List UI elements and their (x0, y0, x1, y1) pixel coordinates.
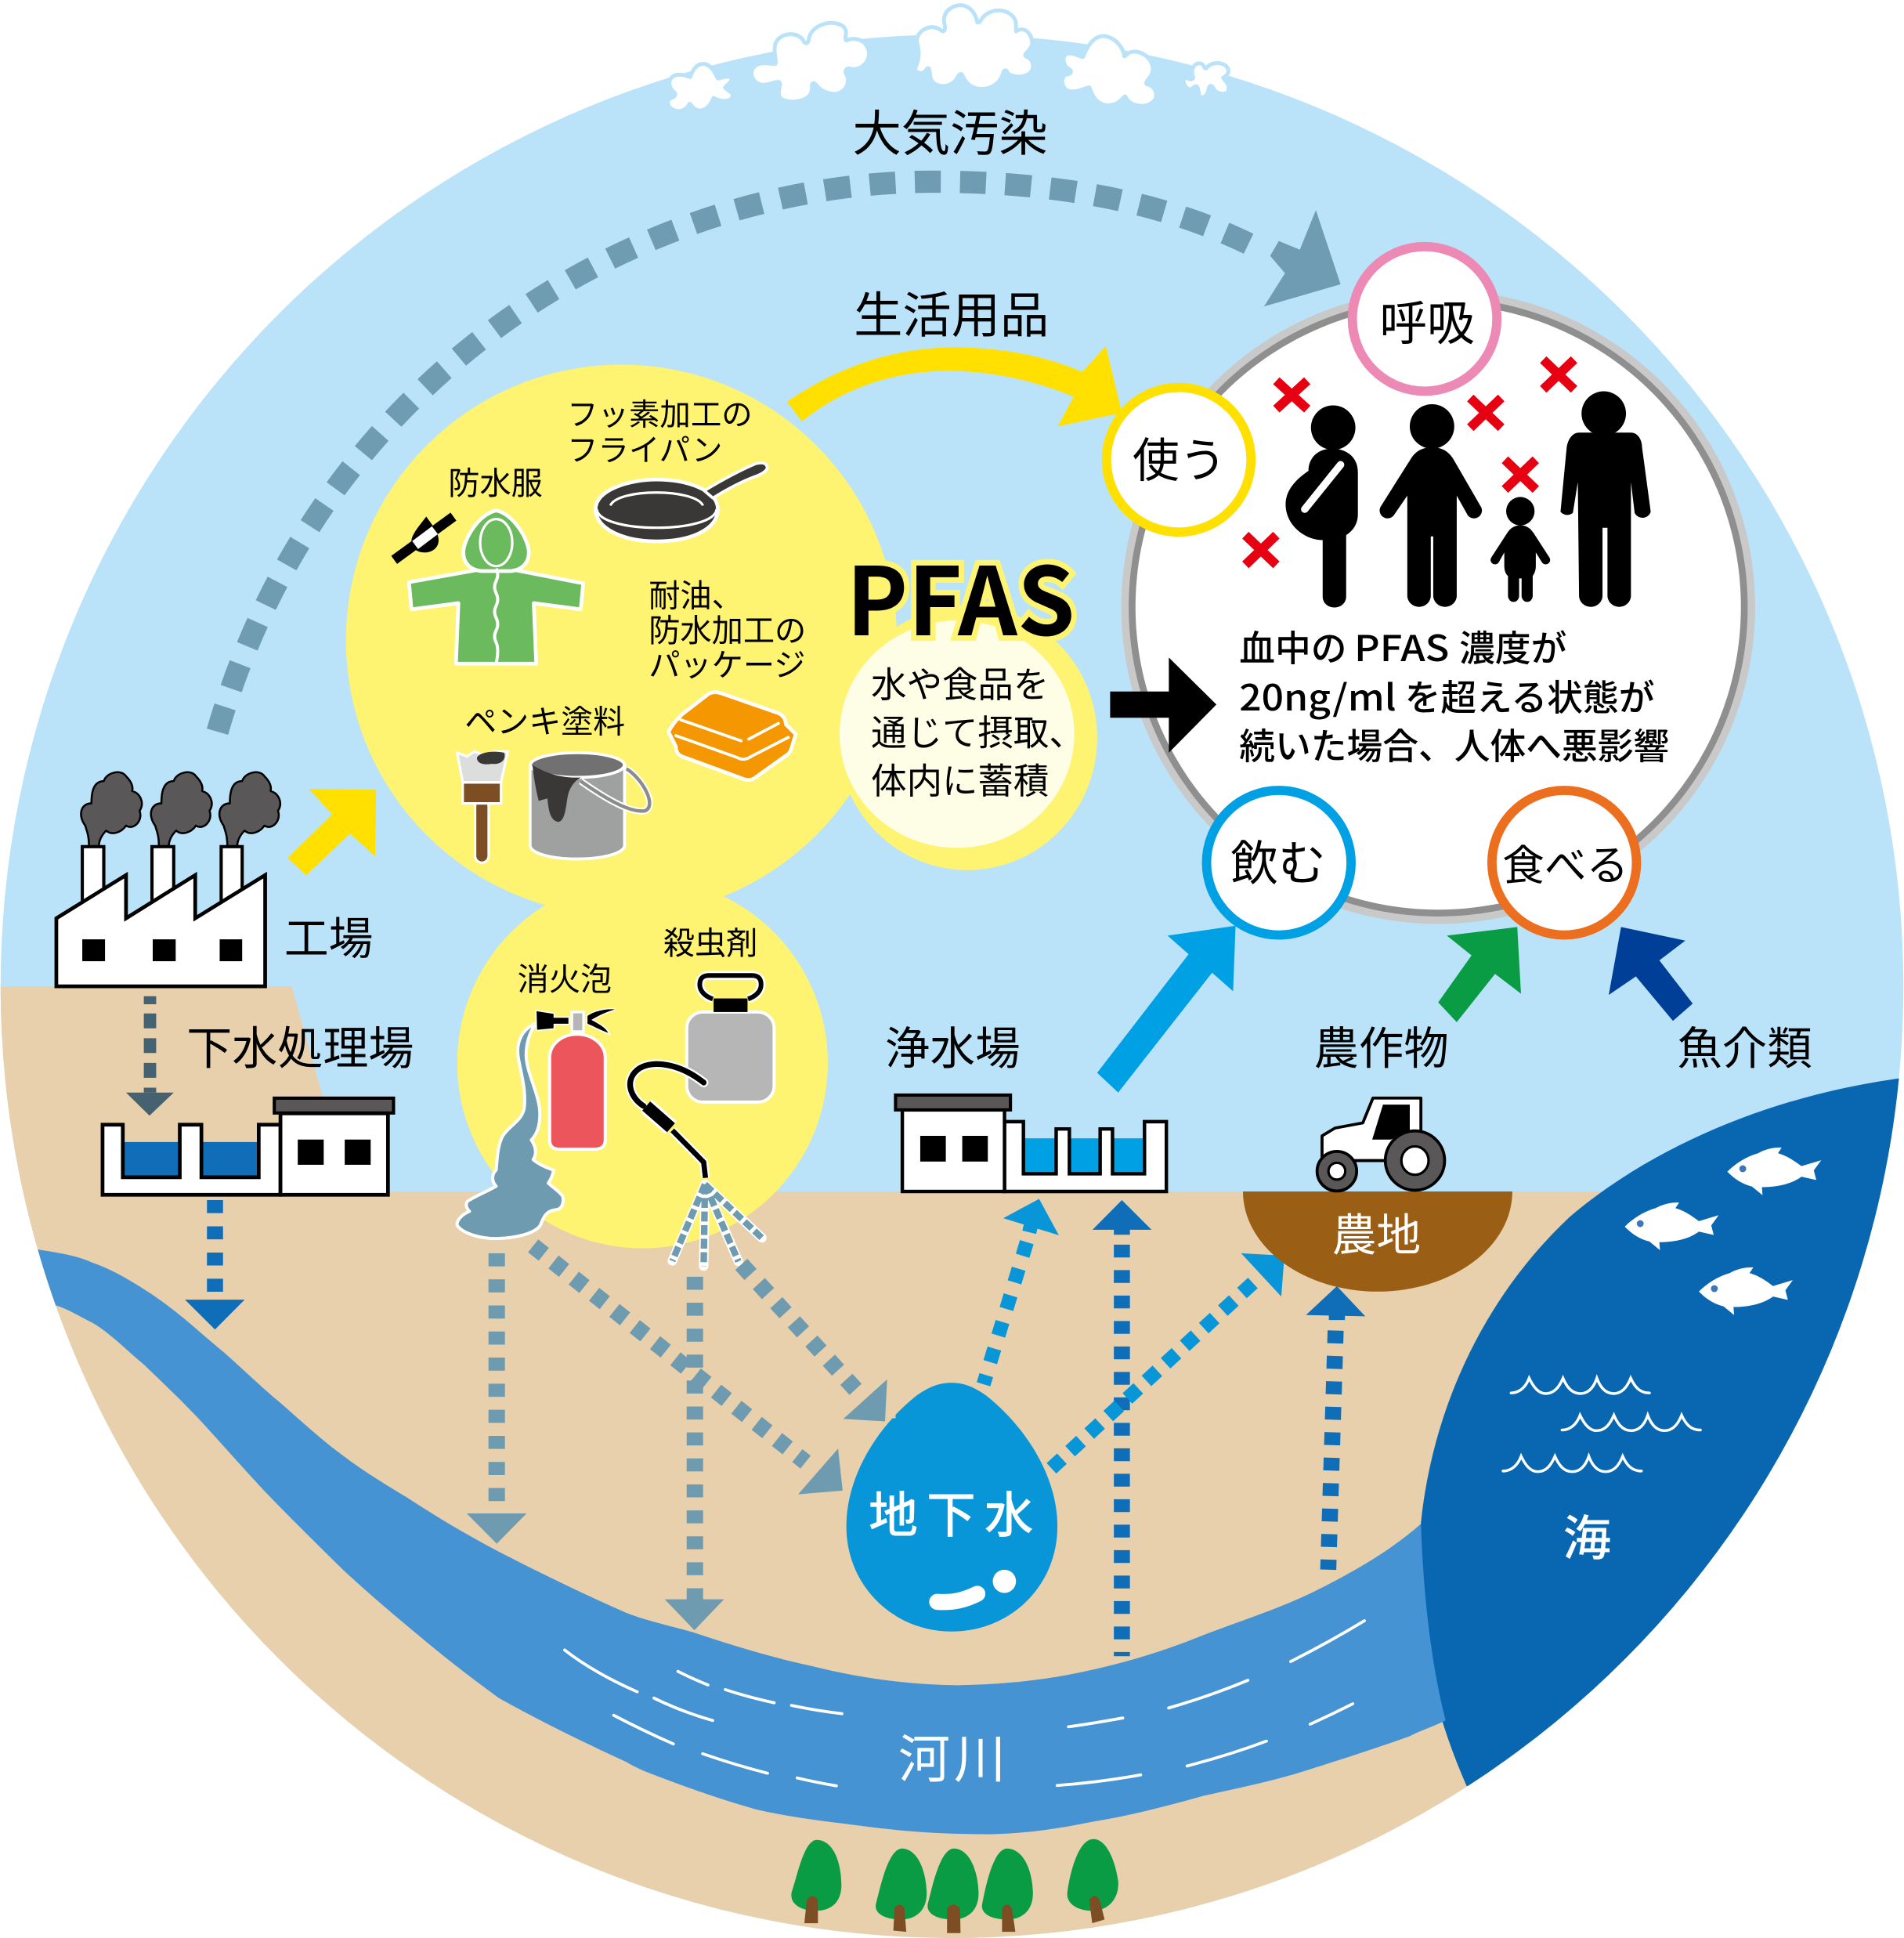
icon: tractor (1317, 1098, 1444, 1191)
health effect text: を超える状態が (1405, 670, 1655, 721)
label: pesticide: 殺虫剤 (663, 926, 757, 961)
label: crops: 農作物 (1314, 1024, 1449, 1074)
icon: groundwater drop (847, 1383, 1057, 1632)
health effect text (1239, 620, 1669, 770)
panel: human exposure circle (1122, 290, 1755, 924)
heading: air pollution: 大気汚染 (853, 107, 1048, 161)
label: frying pan: フライパン (567, 434, 722, 468)
label: sea: 海 (1563, 1512, 1611, 1566)
arrow: river to farmland (1306, 1286, 1365, 1570)
badge: use: 使う (1133, 435, 1227, 487)
icon: frying pan (595, 463, 768, 541)
label: factory: 工場 (284, 915, 373, 964)
arrow: foam to groundwater (533, 1246, 843, 1495)
river current lines (565, 1621, 1364, 1786)
label: oil and waterproof packaging: 耐油、 (649, 579, 743, 614)
label: waterproof clothes: 防水服 (448, 466, 543, 501)
health effect text: 血中の (1239, 620, 1347, 672)
label: oil and waterproof packaging: 防水加工の (649, 613, 806, 649)
label: sewage plant: 下水処理場 (186, 1023, 414, 1074)
label: seafood: 魚介類 (1677, 1024, 1812, 1074)
icon: fire extinguisher and foam (457, 1009, 615, 1238)
label: oil and waterproof packaging: パッケージ (649, 648, 805, 683)
fish eyes (1637, 1166, 1747, 1292)
panel: intake note: 通じて摂取、 (871, 713, 1085, 753)
fish 1 (1727, 1148, 1821, 1195)
label: frying pan: フッ素加工の (567, 398, 753, 432)
label: fire foam: 消火泡 (518, 962, 612, 997)
icon: factory (56, 772, 280, 986)
icon: adult (1560, 392, 1651, 607)
icon: waterproof jacket (409, 511, 583, 663)
panel: PFAS source blobs (346, 364, 1097, 1249)
health effect text: 20ng/ml (1239, 670, 1396, 721)
red crosses (1245, 360, 1574, 565)
label: groundwater: 地下水 (869, 1488, 1042, 1543)
arrow: air pollution (218, 182, 1341, 732)
label: river: 河川 (898, 1731, 1010, 1789)
icon: farmland (1243, 1191, 1512, 1292)
health effect text: 続いた場合、人体へ悪影響 (1239, 718, 1669, 770)
panel: intake note (840, 620, 1085, 848)
heading: daily goods: 生活用品 (854, 289, 1049, 343)
icon: paint brush (457, 751, 508, 862)
icon: water purification plant (895, 1095, 1166, 1191)
arrow: factory to PFAS (287, 789, 376, 876)
icon: paint can (530, 753, 649, 859)
badge: eat: 食べる (1502, 842, 1628, 889)
arrow: river to water plant (1093, 1200, 1151, 1656)
sea (1421, 1078, 1899, 1786)
arrow: groundwater to water plant (984, 1199, 1059, 1384)
label: paint: ペンキ塗料 (464, 704, 625, 740)
icon: child (1490, 497, 1550, 602)
arrow: foam to river (467, 1253, 526, 1544)
badge: drink (1206, 790, 1351, 935)
panel: intake note: 水や食品を (871, 665, 1049, 705)
icon: water repellent drop crossed out (394, 517, 453, 560)
arrow: crops to eat (1438, 927, 1521, 1022)
health effect text: PFAS (1354, 620, 1449, 672)
river (25, 1246, 1446, 1834)
badge: eat (1492, 790, 1636, 935)
badge: drink: 飲む (1230, 837, 1326, 890)
label: farmland: 農地 (1332, 1212, 1421, 1261)
arrow: PFAS to human (1110, 657, 1216, 753)
badge: use (1107, 388, 1251, 532)
fish 2 (1624, 1202, 1718, 1250)
fish 3 (1699, 1267, 1793, 1315)
health effect text: 濃度が (1459, 620, 1566, 672)
icon: food package (668, 692, 796, 780)
arrow: groundwater to farmland (1051, 1253, 1284, 1468)
arrow: water plant to drink (1097, 926, 1236, 1093)
icon: sewage plant (103, 1098, 393, 1195)
waves (1503, 1378, 1700, 1472)
icon: pesticide sprayer (630, 975, 774, 1266)
trees (791, 1839, 1118, 1933)
heading: PFAS: PFAS (847, 526, 1075, 663)
arrow: sewage plant down (185, 1200, 244, 1329)
icon: pregnant woman (1285, 406, 1358, 607)
icon: man (1379, 404, 1482, 607)
arrow: daily goods to use (787, 346, 1122, 426)
badge: breathe (1353, 247, 1497, 391)
badge: breathe: 呼吸 (1379, 297, 1475, 350)
arrow: pesticide to river (665, 1277, 724, 1630)
arrow: pesticide to groundwater (742, 1264, 887, 1421)
panel: intake note: 体内に蓄積 (871, 761, 1049, 801)
arrow: seafood to eat (1609, 927, 1693, 1021)
arrow: factory to sewage plant (126, 996, 174, 1115)
clouds (668, 5, 1229, 111)
label: water purification plant: 浄水場 (885, 1024, 1021, 1074)
